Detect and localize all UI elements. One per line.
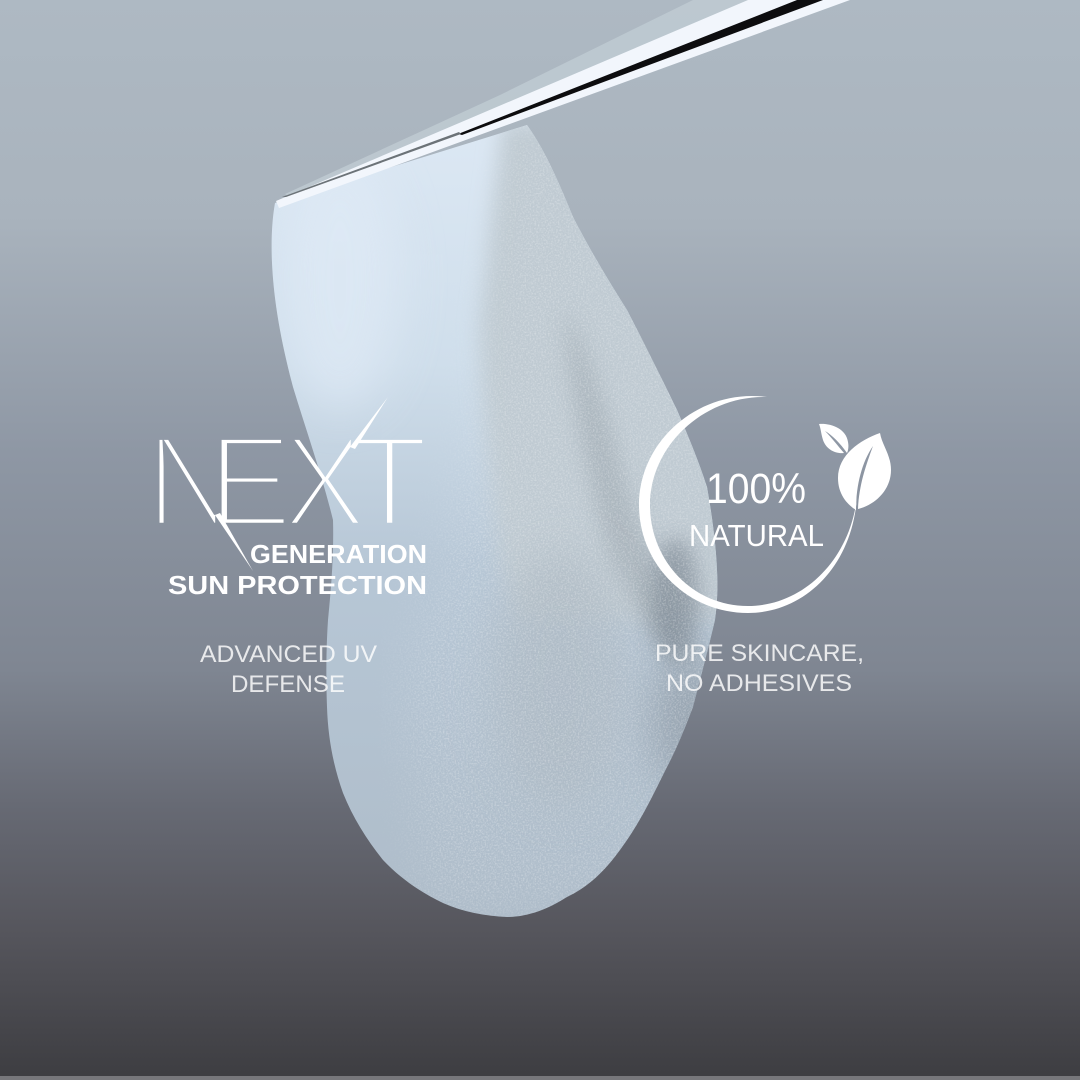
tweezers tip line — [282, 132, 461, 197]
right block: 100% natural badge — [639, 396, 891, 697]
badge label: natural: NATURAL — [689, 518, 824, 553]
tweezers white blade — [276, 0, 850, 208]
caption: pure skincare, no adhesives — [655, 640, 864, 697]
caption: pure skincare, no adhesives: PURE SKINCARE, — [655, 640, 864, 667]
tweezers frosted upper edge — [285, 0, 752, 198]
logotype: NEXT: NEXT — [146, 409, 428, 554]
caption: advanced uv defense: ADVANCED UV — [200, 641, 377, 668]
caption: advanced uv defense: DEFENSE — [231, 671, 345, 698]
tweezers — [276, 0, 850, 208]
subheading: generation: GENERATION — [250, 539, 427, 569]
subheading: sun protection: SUN PROTECTION — [168, 570, 427, 600]
caption: advanced uv defense — [200, 641, 377, 698]
caption: pure skincare, no adhesives: NO ADHESIVES — [666, 670, 852, 697]
badge label: 100%: 100% — [706, 465, 806, 513]
icon: large leaf — [838, 433, 891, 510]
tweezers dark gap — [458, 0, 823, 135]
left block: next generation sun protection — [146, 397, 428, 698]
bottom edge strip — [0, 1076, 1080, 1080]
icon: small leaf — [819, 424, 848, 453]
patch: translucent sun protection film — [260, 120, 730, 920]
badge ring — [639, 396, 857, 613]
